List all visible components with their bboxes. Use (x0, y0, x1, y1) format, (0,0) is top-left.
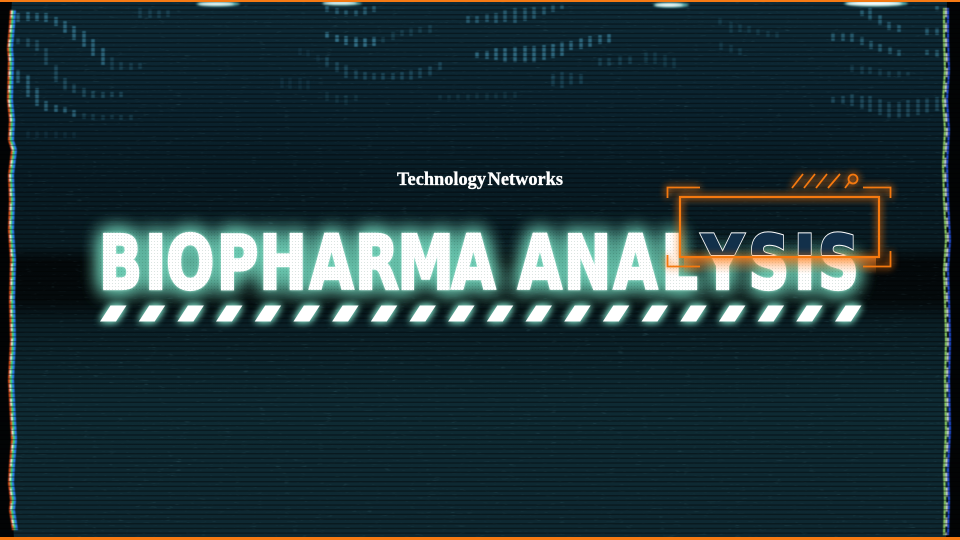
stripe row (100, 306, 862, 322)
scanner box (680, 197, 879, 257)
blue channel (12, 10, 17, 530)
wave: upper right left part (646, 18, 777, 68)
title dot-matrix texture (98, 232, 862, 291)
wave: top centre left (327, 6, 374, 16)
bottom orange border (0, 537, 960, 540)
wave: bright centre left (327, 32, 374, 47)
scanner frame (668, 174, 890, 266)
white core (9, 10, 14, 530)
icon: magnifier (845, 174, 858, 188)
wave: short centre right (553, 56, 630, 88)
glitched letters inside scanner box (698, 231, 854, 255)
wave: upper left tail (112, 8, 168, 70)
wave: mid centre (327, 57, 440, 80)
slashes (792, 174, 840, 188)
waveform bars (18, 5, 937, 138)
black right margin (945, 0, 960, 540)
wave: top centre right (468, 5, 562, 23)
wave: third left (18, 70, 74, 117)
top orange border (0, 0, 960, 2)
wave: third right (852, 65, 908, 77)
black left margin (0, 0, 14, 540)
glitched letters fill: YSIS (701, 221, 859, 307)
right edge glitch (943, 8, 950, 535)
wave: top right (862, 6, 937, 35)
wave: third left tail (84, 113, 131, 120)
wave: centre left tail (383, 25, 430, 43)
white core (945, 8, 948, 535)
streak glow (196, 0, 908, 7)
corner bracket: bottom right (863, 251, 890, 266)
title: Biopharma Analysis: BIOPHARMA ANALYSIS (99, 221, 859, 307)
wave: second left (18, 38, 121, 98)
logo: Technology Networks: Technology Networks (397, 170, 563, 190)
corner bracket: bottom left (668, 255, 700, 266)
orange tint below scanner (684, 257, 876, 274)
wave: bottom right (833, 94, 937, 118)
green channel (10, 10, 15, 530)
blue channel (947, 8, 950, 535)
top glitch streaks (196, 0, 908, 7)
corner bracket: top right (863, 188, 890, 198)
wave: fourth left faint (28, 48, 318, 138)
wave: second right (833, 33, 937, 57)
wave: lower centre faint (327, 92, 515, 105)
red channel (8, 10, 13, 530)
left edge glitch (8, 10, 17, 530)
wave: upper left (18, 12, 103, 65)
wave: bright centre right (477, 34, 609, 62)
green channel (943, 8, 946, 535)
corner bracket: top left (668, 188, 700, 198)
glitched letters outline: YSIS (701, 221, 859, 307)
